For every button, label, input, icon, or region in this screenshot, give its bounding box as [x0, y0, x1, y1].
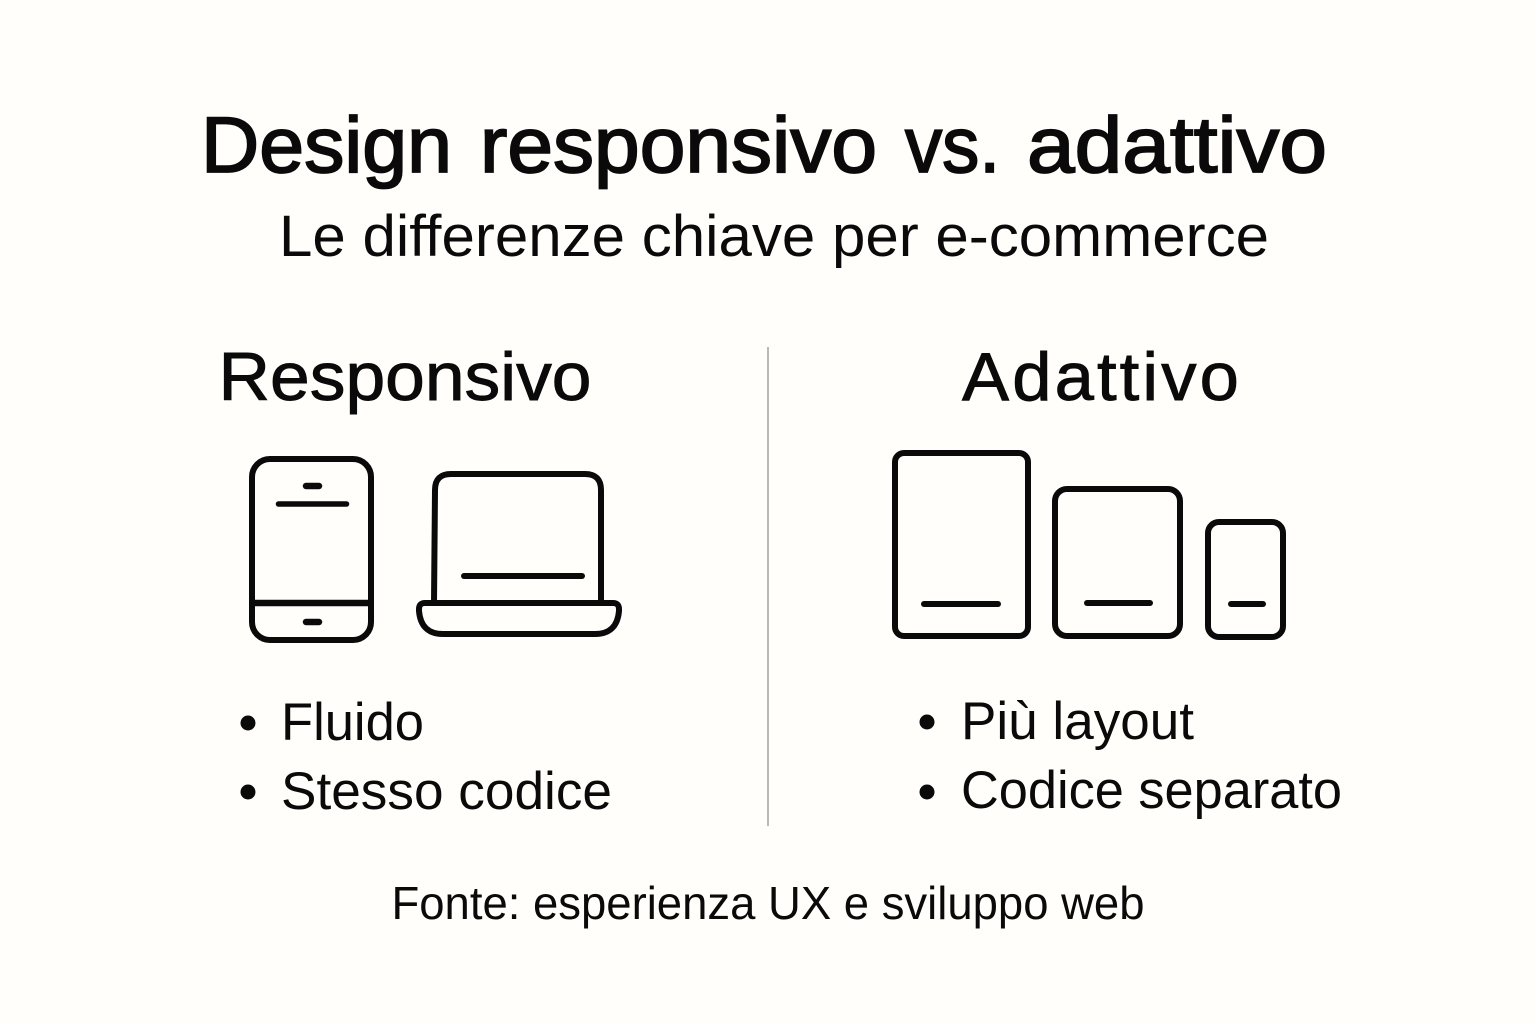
title: Design [201, 100, 452, 189]
list: Adattivo features: Più layout [961, 692, 1194, 751]
title [201, 100, 1327, 189]
list: Responsivo features: Stesso codice [281, 762, 612, 821]
list: Adattivo features [920, 692, 1342, 820]
icon: smartphone [252, 459, 371, 640]
list: Responsivo features: Fluido [281, 693, 424, 752]
subtitle: Le differenze chiave per e-commerce [279, 204, 1269, 269]
icon: small phone [1208, 522, 1283, 637]
heading: Responsivo: Responsivo [218, 339, 592, 415]
icon: large tablet [895, 453, 1028, 636]
heading: Adattivo: Adattivo [962, 339, 1242, 415]
icon: laptop [419, 474, 619, 634]
title: responsivo [480, 100, 877, 189]
title: vs. [905, 100, 1000, 189]
icon: medium tablet [1055, 489, 1180, 636]
list: Adattivo features: Codice separato [961, 761, 1342, 820]
list: Responsivo features [240, 693, 612, 821]
source note: Fonte: esperienza UX e sviluppo web [392, 877, 1144, 929]
title: adattivo [1027, 100, 1327, 189]
divider [767, 347, 769, 826]
